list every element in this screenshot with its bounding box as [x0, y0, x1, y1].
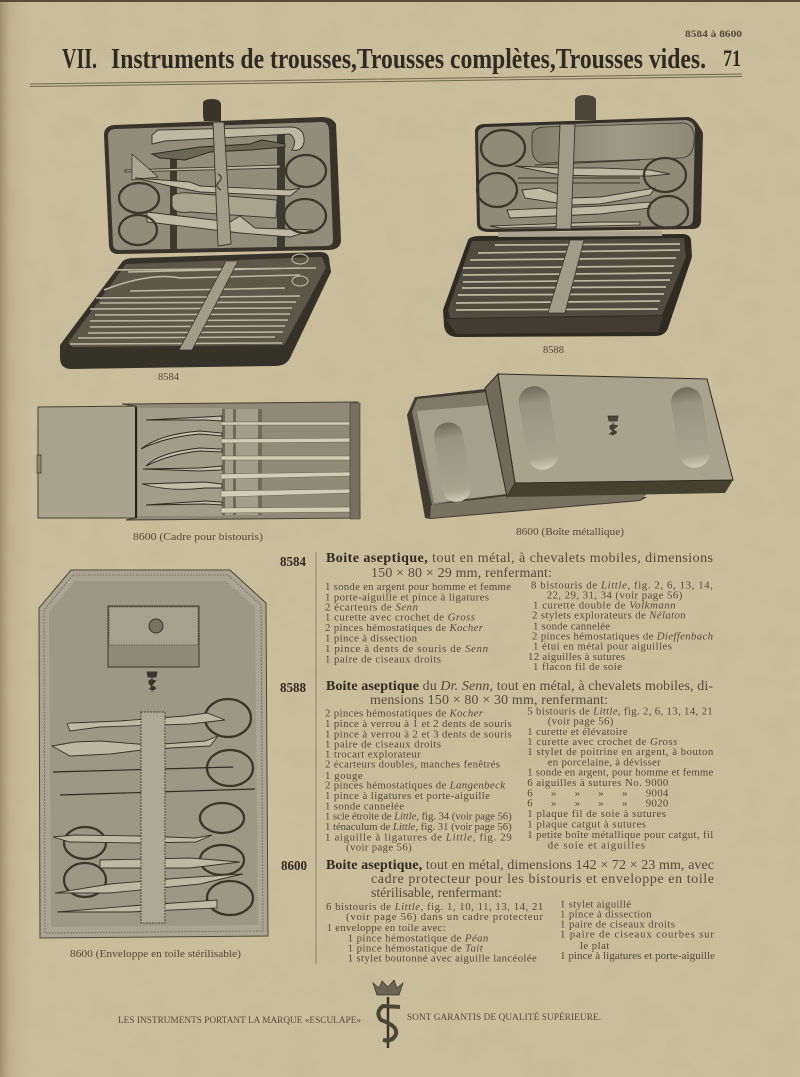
open lid — [104, 117, 341, 254]
right contents list: 1 curette et élévatoire — [527, 726, 628, 738]
lid interior — [108, 122, 333, 250]
tray outer — [443, 234, 692, 337]
right contents list: 1 curette double de Volkmann — [533, 600, 676, 612]
left contents list: 1 aiguille à ligatures de Little, fig. 29 — [325, 831, 512, 843]
tray instruments — [70, 268, 316, 344]
stitching — [44, 575, 263, 933]
right contents list: 1 étui en métal pour aiguilles — [533, 640, 672, 652]
left contents list: 1 scie étroite de Little, fig. 34 (voir page 56) — [325, 811, 512, 823]
reference number: 8588 — [280, 680, 306, 695]
section number: VII. — [62, 44, 97, 75]
left contents list: 1 gouge — [325, 770, 363, 782]
article 8600 — [281, 858, 715, 965]
right contents list: 12 aiguilles à sutures — [528, 651, 625, 663]
tray slot — [432, 420, 473, 504]
left contents list — [326, 901, 543, 965]
left contents list: 1 trocart explorateur — [325, 749, 421, 761]
right contents list: 2 stylets explorateurs de Nélaton — [532, 610, 686, 622]
triangular gouge — [132, 154, 158, 180]
right contents list: 1 curette avec crochet de Gross — [527, 736, 677, 748]
lid rods — [170, 133, 285, 250]
page header — [30, 30, 742, 86]
illustration: case 8588 — [443, 95, 703, 337]
right contents list: 1 pince à dissection — [560, 909, 652, 921]
right contents list: 1 paire de ciseaux courbes sur — [560, 929, 714, 941]
caption cadre: 8600 (Cadre pour bistouris) — [133, 532, 264, 543]
left contents list: 2 pinces hémostatiques de Kocher — [325, 622, 484, 634]
instruments in lid — [490, 160, 670, 228]
right contents list — [560, 899, 715, 962]
right contents list: 6 aiguilles à sutures No. 9000 — [527, 777, 668, 789]
tray outer body — [407, 389, 647, 519]
left contents list: 1 ténaculum de Little, fig. 31 (voir page 56) — [325, 821, 512, 833]
left contents list: 1 pince à verrou à 2 et 3 dents de souris — [325, 728, 512, 740]
lid strap — [556, 124, 575, 229]
right contents list: 2 pinces hémostatiques de Dieffenbach — [532, 630, 713, 642]
envelope inner panel — [49, 581, 258, 927]
caption boite: 8600 (Boîte métallique) — [516, 527, 625, 538]
left contents list: 1 pince hémostatique de Péan — [348, 932, 488, 944]
clasp — [575, 95, 596, 120]
left contents list: 1 paire de ciseaux droits — [325, 738, 441, 750]
lid strap — [213, 122, 231, 246]
article 8588 — [280, 679, 714, 854]
dark columns — [222, 409, 262, 515]
tray floor — [417, 405, 507, 503]
description line 3: stérilisable, renfermant: — [371, 886, 502, 901]
tray interior — [68, 257, 326, 347]
tray strap — [179, 261, 238, 350]
hinge strip — [498, 231, 662, 237]
left contents list: 1 paire de ciseaux droits — [325, 653, 441, 665]
crest — [147, 672, 157, 692]
scissor rings — [477, 130, 688, 228]
page number: 71 — [723, 46, 741, 71]
frame edge — [350, 403, 360, 519]
staff — [387, 997, 389, 1048]
right contents list: 5 bistouris de Little, fig. 2, 6, 13, 14, 21 — [527, 705, 713, 717]
right contents list: 1 plaque catgut à sutures — [527, 819, 646, 831]
caption 8588: 8588 — [543, 345, 564, 356]
left contents list: 1 sonde en argent pour homme et femme — [325, 581, 511, 593]
left contents list: 1 stylet boutonné avec aiguille lancéolée — [348, 953, 537, 965]
description line 2: cadre protecteur pour les bistouris et enveloppe en toile — [371, 872, 714, 887]
footer text left: LES INSTRUMENTS PORTANT LA MARQUE «ESCULAPE» — [118, 1015, 361, 1025]
crest — [217, 174, 221, 190]
sliding cover — [38, 406, 136, 518]
lens panel — [532, 123, 694, 163]
left contents list: 6 bistouris de Little, fig. 1, 10, 11, 13, 14, 21 — [326, 901, 543, 913]
scissor rings — [119, 155, 326, 245]
forceps — [152, 140, 285, 160]
article 8584 — [280, 551, 713, 673]
crest — [608, 416, 618, 436]
tray inner wall — [412, 392, 505, 505]
description line 2: 150 × 80 × 29 mm, renfermant: — [371, 566, 552, 581]
instruments — [52, 713, 255, 912]
straight scissors — [135, 178, 300, 196]
description: Boite aseptique du Dr. Senn, tout en métal, à chevalets mobiles, di- — [326, 679, 713, 694]
illustration: scalpel frame 8600 — [37, 402, 360, 520]
tray rings — [292, 254, 308, 286]
crown — [373, 980, 403, 995]
illustration: case 8584 — [60, 99, 341, 369]
right contents list: 1 pince à ligatures et porte-aiguille — [560, 950, 715, 962]
left contents list — [325, 708, 512, 854]
right contents list: de soie et aiguilles — [548, 839, 645, 851]
right contents list: 8 bistouris de Little, fig. 2, 6, 13, 14, — [531, 579, 713, 591]
stylet — [125, 165, 280, 172]
tray front wall — [446, 316, 663, 334]
illustration: cloth roll 8600 — [39, 570, 268, 938]
left contents list — [325, 581, 511, 665]
left contents list: 1 pince à ligatures et porte-aiguille — [325, 790, 490, 802]
right contents list: 1 sonde en argent, pour homme et femme — [527, 766, 714, 778]
envelope outer — [39, 570, 268, 938]
right contents list — [527, 705, 714, 851]
scissor rings — [64, 699, 253, 915]
handle bars — [221, 422, 350, 513]
tray interior — [448, 238, 686, 318]
page range: 8584 à 8600 — [685, 30, 742, 40]
illustration: metal box 8600 — [407, 374, 733, 519]
right contents list — [528, 579, 713, 673]
description: Boite aseptique, tout en métal, à chevalets mobiles, dimensions — [326, 551, 713, 566]
left contents list: 1 pince à verrou à 1 et 2 dents de souris — [325, 718, 512, 730]
left contents list: 2 écarteurs de Senn — [325, 601, 418, 613]
lid front face — [507, 480, 733, 497]
right contents list: 1 paire de ciseaux droits — [560, 919, 675, 931]
right contents list: 1 flacon fil de soie — [533, 661, 622, 673]
left contents list: 1 curette avec crochet de Gross — [325, 612, 475, 624]
etui — [172, 193, 277, 218]
right contents list: 1 stylet aiguillé — [560, 899, 631, 911]
blade area — [138, 408, 222, 516]
open lid — [475, 117, 703, 232]
right contents list: 1 petite boîte métallique pour catgut, fil — [527, 829, 713, 841]
right contents list: le plat — [580, 940, 609, 952]
reference number: 8600 — [281, 858, 307, 873]
reference number: 8584 — [280, 554, 306, 569]
lid interior — [478, 120, 695, 229]
tray front face — [430, 494, 647, 518]
left contents list: 1 porte-aiguille et pince à ligatures — [325, 591, 489, 603]
column rule — [315, 552, 317, 964]
right contents list: 1 sonde cannelée — [533, 620, 610, 632]
tray outer — [60, 252, 331, 369]
left contents list: 1 pince à dents de souris de Senn — [325, 643, 488, 655]
serpent — [378, 1006, 400, 1040]
strap — [141, 712, 165, 923]
frame divider — [135, 407, 137, 518]
lid left face — [485, 374, 515, 497]
scalpels — [141, 416, 222, 505]
footer guarantee — [118, 980, 601, 1048]
cover tab — [37, 455, 41, 473]
pocket flap — [109, 607, 198, 645]
right contents list: 6 » » » » 9020 — [527, 798, 668, 810]
left contents list: 1 enveloppe en toile avec: — [327, 922, 446, 934]
right contents list: (voir page 56) — [548, 716, 614, 728]
left contents list: 2 écarteurs doubles, manches fenêtrés — [325, 759, 500, 771]
right contents list: en porcelaine, à dévisser — [548, 756, 661, 768]
left contents list: (voir page 56) dans un cadre protecteur — [346, 911, 543, 923]
frame body — [122, 402, 360, 520]
title: Instruments de trousses,Trousses complètes,Trousses vides. — [111, 44, 706, 75]
left contents list: 2 pinces hémostatiques de Langenbeck — [325, 780, 505, 792]
right contents list: 6 » » » » 9004 — [527, 787, 669, 799]
left contents list: 1 sonde cannelée — [325, 800, 404, 812]
left contents list: (voir page 56) — [346, 842, 412, 854]
tray strap — [548, 240, 584, 313]
left contents list: 1 pince hémostatique de Tait — [348, 943, 484, 955]
right contents list: 1 plaque fil de soie à sutures — [527, 808, 666, 820]
right contents list: 1 stylet de poitrine en argent, à bouton — [527, 746, 714, 758]
left contents list: 2 pinces hémostatiques de Kocher — [325, 708, 484, 720]
header rule — [30, 74, 742, 86]
pocket — [108, 606, 199, 667]
lid ovals — [517, 384, 712, 472]
description: Boite aseptique, tout en métal, dimensions 142 × 72 × 23 mm, avec — [326, 858, 714, 873]
caption enveloppe: 8600 (Enveloppe en toile stérilisable) — [70, 949, 242, 960]
icon: crown and serpent staff — [373, 980, 403, 1048]
curved scissors — [147, 212, 313, 237]
footer text right: SONT GARANTIS DE QUALITÉ SUPÉRIEURE. — [407, 1012, 601, 1022]
lid top — [498, 374, 733, 483]
clasp — [203, 99, 221, 121]
retractor and hook — [152, 127, 304, 150]
tray instruments — [456, 244, 680, 310]
left contents list: 1 pince à dissection — [325, 633, 418, 645]
right contents list: 22, 29, 31, 34 (voir page 56) — [547, 590, 683, 602]
description line 2: mensions 150 × 80 × 30 mm, renfermant: — [370, 693, 608, 708]
snap button — [149, 619, 163, 633]
caption 8584: 8584 — [158, 372, 180, 383]
